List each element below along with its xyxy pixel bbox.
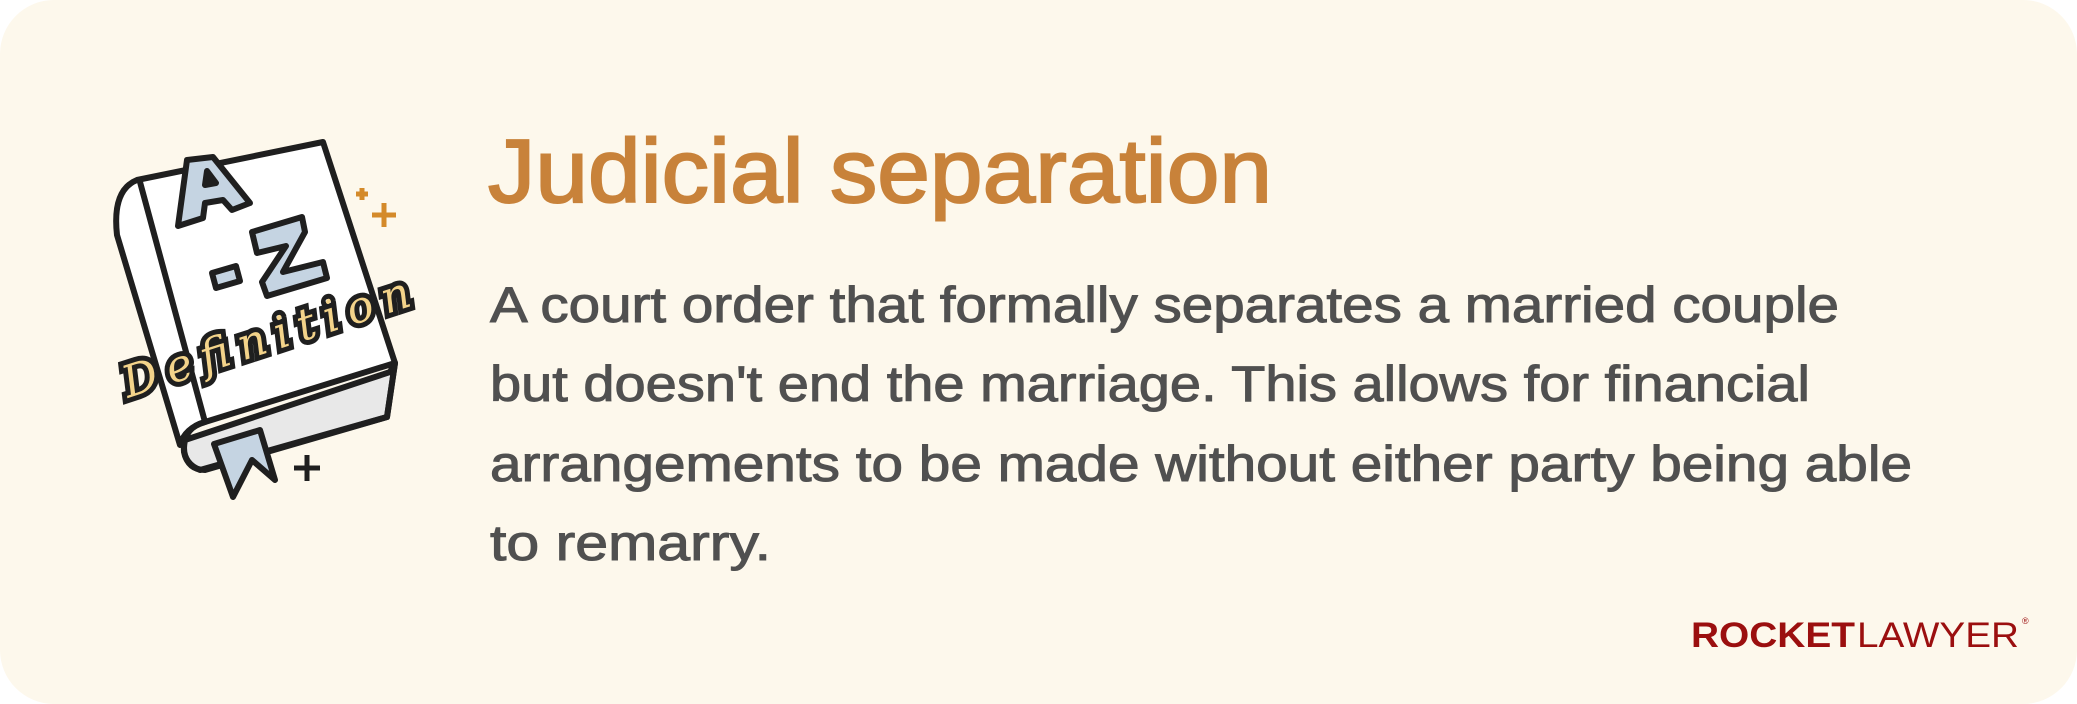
body text [490,277,1912,571]
logo: Rocket Lawyer: ® [2022,616,2029,626]
pages block [184,363,395,470]
body text: but doesn't end the marriage. This allows for financial [490,356,1810,412]
letter A [178,157,250,226]
letter Z [252,217,327,296]
body text: A court order that formally separates a married couple [490,277,1839,333]
logo: Rocket Lawyer [1691,616,2029,655]
icon: A-Z definition book [116,142,395,497]
bookmark [214,430,275,497]
dash [212,266,240,288]
icon: definition script label: Definition [115,267,417,409]
body text: arrangements to be made without either party being able [490,436,1912,492]
logo: Rocket Lawyer: ROCKET [1691,616,1855,655]
title: Judicial separation [488,122,1272,222]
cover [116,142,395,445]
icon: sparkles [294,188,396,481]
logo: Rocket Lawyer: LAWYER [1857,616,2019,655]
body text: to remarry. [490,515,771,571]
